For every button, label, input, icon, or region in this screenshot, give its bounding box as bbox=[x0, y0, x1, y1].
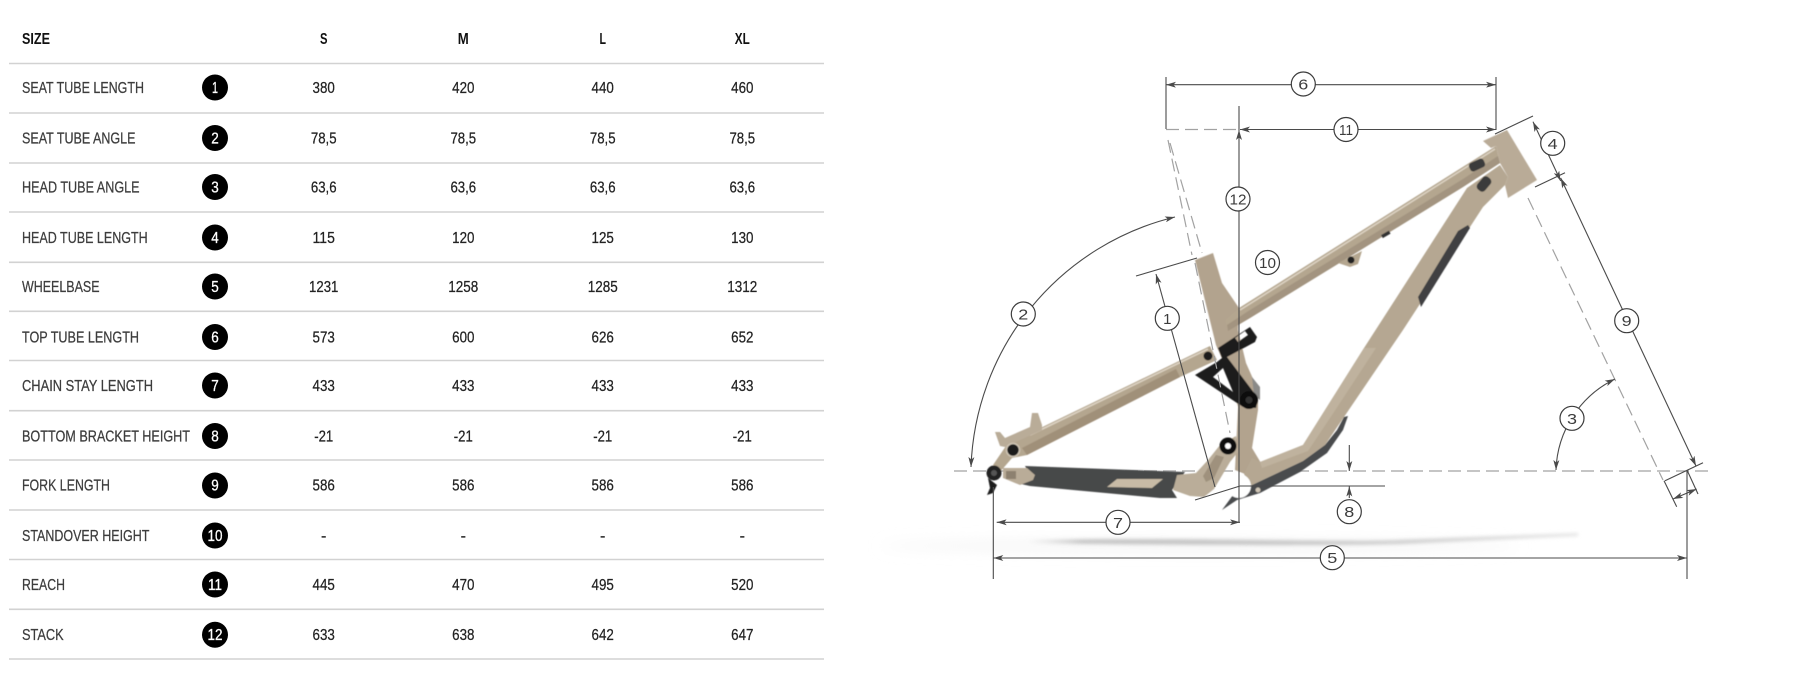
row: seat tube angle: 78,5 bbox=[450, 130, 476, 148]
dimension 12: stack: 12 bbox=[1230, 192, 1246, 208]
row: standover height: STANDOVER HEIGHT bbox=[22, 528, 150, 545]
down tube bbox=[1244, 165, 1508, 486]
row: seat tube angle: 2 bbox=[211, 130, 219, 148]
head tube bbox=[1483, 130, 1537, 198]
table header row: M bbox=[458, 31, 469, 48]
table header row: SIZE bbox=[22, 31, 50, 48]
row: fork length: 586 bbox=[313, 478, 335, 494]
bottom bracket opening bbox=[1227, 474, 1251, 498]
table header row: XL bbox=[735, 31, 750, 48]
main pivot bbox=[1220, 438, 1236, 454]
row: standover height: 10 bbox=[208, 528, 223, 545]
row: stack: STACK bbox=[22, 627, 64, 644]
row: reach: REACH bbox=[22, 577, 65, 594]
dimension 2: seat tube angle arc: 2 bbox=[1018, 306, 1028, 324]
row: reach bbox=[22, 572, 754, 598]
row: reach: 445 bbox=[313, 577, 335, 594]
row: seat tube length: 380 bbox=[313, 80, 335, 97]
seat stay and dropout bbox=[993, 346, 1217, 472]
row: reach: 470 bbox=[452, 577, 475, 594]
row: stack bbox=[22, 622, 754, 648]
row: bottom bracket height: -21 bbox=[454, 428, 473, 446]
row: head tube length: 115 bbox=[313, 230, 335, 247]
dimension 7: chain stay length: 7 bbox=[1113, 515, 1123, 532]
dimension 4: head tube length: 4 bbox=[1548, 136, 1558, 153]
row: fork length: 586 bbox=[452, 478, 475, 494]
table header row: L bbox=[599, 31, 606, 48]
rocker link bbox=[1195, 327, 1260, 409]
row: seat tube length: 440 bbox=[592, 80, 614, 97]
row: seat tube angle: 78,5 bbox=[590, 130, 616, 148]
panel: geometry table bbox=[9, 31, 824, 659]
dimension 5: wheelbase bbox=[993, 470, 1687, 579]
lower link cut-out bbox=[1203, 455, 1224, 482]
row: top tube length: 600 bbox=[452, 329, 475, 346]
row: chain stay length: 433 bbox=[592, 378, 614, 395]
row: seat tube length: 420 bbox=[452, 80, 475, 97]
row: top tube length bbox=[22, 324, 754, 350]
row: bottom bracket height bbox=[22, 423, 752, 449]
row: head tube length bbox=[22, 224, 754, 250]
horizontal dashed axle line bbox=[954, 470, 1713, 472]
dimension 7: chain stay length bbox=[997, 510, 1240, 534]
row: seat tube length: 460 bbox=[731, 80, 754, 97]
row: top tube length: TOP TUBE LENGTH bbox=[22, 329, 139, 346]
ground shadow bbox=[880, 533, 1578, 551]
row: wheelbase: 1231 bbox=[309, 279, 338, 296]
row: head tube angle: 3 bbox=[211, 180, 219, 196]
row: chain stay length: CHAIN STAY LENGTH bbox=[22, 378, 153, 395]
row: bottom bracket height: 8 bbox=[211, 428, 219, 446]
dimension 4: head tube length bbox=[1495, 116, 1565, 187]
row: bottom bracket height: BOTTOM BRACKET HEIGHT bbox=[22, 428, 190, 446]
row: seat tube angle: SEAT TUBE ANGLE bbox=[22, 130, 136, 148]
dimension 11: reach: 11 bbox=[1339, 122, 1353, 139]
dimension 1: seat tube length bbox=[1136, 258, 1240, 500]
row: stack: 647 bbox=[731, 627, 754, 644]
row: bottom bracket height: -21 bbox=[314, 428, 333, 446]
row: wheelbase: WHEELBASE bbox=[22, 279, 100, 296]
row: chain stay length: 433 bbox=[731, 378, 754, 395]
row: chain stay length: 433 bbox=[313, 378, 335, 395]
row: bottom bracket height: -21 bbox=[733, 428, 752, 446]
row: seat tube angle bbox=[22, 125, 755, 151]
row: chain stay length: 433 bbox=[452, 378, 475, 395]
row: fork length bbox=[22, 472, 754, 498]
dimension 11: reach bbox=[1240, 118, 1496, 142]
chain stay with dark protector bbox=[1003, 466, 1185, 498]
row: head tube angle: 63,6 bbox=[311, 180, 337, 196]
dimension 3: head tube angle arc: 3 bbox=[1567, 411, 1577, 428]
row: stack: 642 bbox=[592, 627, 614, 644]
dimension 12: stack bbox=[1226, 106, 1250, 522]
row: wheelbase: 1258 bbox=[448, 279, 478, 296]
row: stack: 12 bbox=[208, 627, 223, 644]
row: seat tube angle: 78,5 bbox=[311, 130, 337, 148]
row: head tube angle: 63,6 bbox=[450, 180, 476, 196]
dimension 5: wheelbase: 5 bbox=[1327, 550, 1337, 567]
row: fork length: 586 bbox=[731, 478, 754, 494]
row: head tube length: 130 bbox=[731, 230, 754, 247]
row: seat tube angle: 78,5 bbox=[729, 130, 755, 148]
dimension 6: top tube length: 6 bbox=[1298, 76, 1308, 94]
bottom bracket bolt bbox=[1256, 488, 1260, 492]
row: stack: 638 bbox=[452, 627, 475, 644]
row: fork length: 586 bbox=[592, 478, 614, 494]
row: top tube length: 626 bbox=[592, 329, 614, 346]
table header row: S bbox=[320, 31, 328, 48]
row: chain stay length: 7 bbox=[211, 378, 219, 395]
dimension 6: top tube length bbox=[1166, 72, 1496, 130]
dimension 8: bottom bracket height bbox=[1240, 445, 1385, 524]
row: top tube length: 6 bbox=[211, 329, 219, 346]
dimension 9: fork length: 9 bbox=[1622, 313, 1632, 330]
row: head tube length: 120 bbox=[452, 230, 475, 247]
row: top tube length: 652 bbox=[731, 329, 754, 346]
row: head tube angle: 63,6 bbox=[590, 180, 616, 196]
row: head tube angle: 63,6 bbox=[729, 180, 755, 196]
down tube dark guard bbox=[1418, 225, 1470, 307]
row: seat tube length bbox=[22, 74, 754, 100]
row: top tube length: 573 bbox=[313, 329, 335, 346]
row: head tube length: 125 bbox=[592, 230, 614, 247]
row: head tube length: HEAD TUBE LENGTH bbox=[22, 230, 148, 247]
dimension: fork offset bbox=[1664, 470, 1698, 507]
rear axle and derailleur hanger bbox=[986, 444, 1020, 495]
dimension 9: fork length bbox=[1561, 178, 1703, 481]
row: wheelbase: 1312 bbox=[727, 279, 757, 296]
row: reach: 520 bbox=[731, 577, 754, 594]
row: head tube angle bbox=[22, 174, 755, 200]
fork dashed centre line bbox=[1528, 198, 1663, 480]
row: wheelbase: 1285 bbox=[588, 279, 618, 296]
row: reach: 11 bbox=[208, 577, 222, 594]
dimension 8: bottom bracket height: 8 bbox=[1344, 504, 1354, 521]
row: standover height bbox=[22, 522, 745, 548]
row: seat tube length: SEAT TUBE LENGTH bbox=[22, 80, 144, 97]
row: standover height: - bbox=[461, 528, 466, 545]
table header row bbox=[22, 31, 750, 48]
row: reach: 495 bbox=[592, 577, 614, 594]
row: head tube angle: HEAD TUBE ANGLE bbox=[22, 180, 140, 196]
dimension 3: head tube angle arc bbox=[1556, 379, 1615, 470]
row: wheelbase bbox=[22, 274, 757, 300]
row: standover height: - bbox=[740, 528, 745, 545]
row: seat tube length: 1 bbox=[212, 80, 218, 97]
frame illustration bbox=[986, 130, 1537, 510]
row: standover height: - bbox=[321, 528, 326, 545]
seat tube dashed centre lines bbox=[1166, 130, 1240, 433]
row: wheelbase: 5 bbox=[211, 279, 219, 296]
top tube bbox=[1225, 146, 1500, 331]
row: chain stay length bbox=[22, 372, 754, 398]
row: fork length: 9 bbox=[211, 478, 219, 494]
panel: geometry diagram bbox=[880, 72, 1713, 579]
head tube ports bbox=[1338, 158, 1493, 267]
row: stack: 633 bbox=[313, 627, 335, 644]
dimension 1: seat tube length: 1 bbox=[1163, 311, 1171, 328]
row: head tube length: 4 bbox=[211, 230, 219, 247]
dimension 2: seat tube angle arc bbox=[971, 217, 1175, 467]
dimension 10: standover label: 10 bbox=[1259, 255, 1276, 272]
row: fork length: FORK LENGTH bbox=[22, 478, 110, 494]
row: bottom bracket height: -21 bbox=[593, 428, 612, 446]
dimension 10: standover label bbox=[1256, 250, 1280, 274]
skid plate bbox=[1222, 416, 1348, 510]
lower link bbox=[1173, 436, 1238, 497]
seat tube bbox=[1195, 253, 1261, 476]
row: standover height: - bbox=[600, 528, 605, 545]
